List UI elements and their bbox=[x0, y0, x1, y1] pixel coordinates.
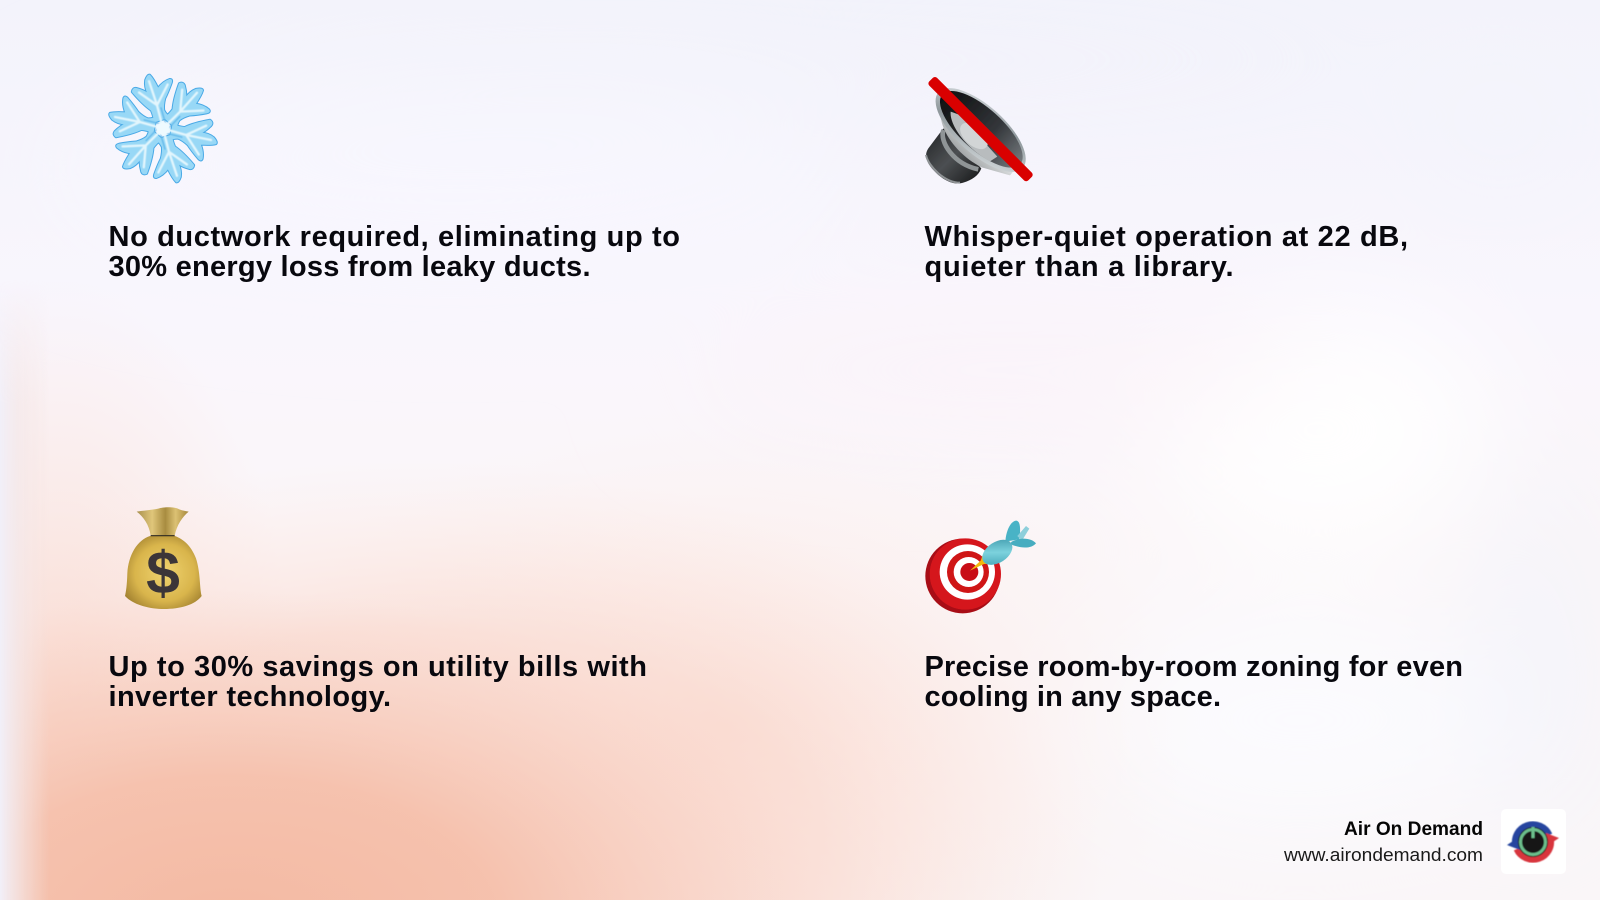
text: no ductwork bbox=[108, 221, 680, 283]
panel: savings bbox=[108, 507, 647, 713]
text: zoning bbox=[924, 651, 1463, 713]
brand name: Air On Demand bbox=[1344, 819, 1483, 840]
icon: money bag bbox=[125, 507, 202, 609]
text: savings: inverter technology. bbox=[108, 681, 391, 713]
text: no ductwork: 30% energy loss from leaky ducts. bbox=[108, 251, 590, 283]
text: zoning: cooling in any space. bbox=[924, 681, 1221, 713]
text: whisper quiet bbox=[924, 221, 1408, 283]
dollar sign: $ bbox=[146, 539, 180, 607]
brand url: www.airondemand.com bbox=[1283, 845, 1483, 865]
text: no ductwork: No ductwork required, eliminating up to bbox=[108, 221, 680, 253]
text: whisper quiet: quieter than a library. bbox=[924, 251, 1234, 283]
icon: target with dart bbox=[925, 521, 1036, 613]
branding footer bbox=[1283, 809, 1566, 874]
text: zoning: Precise room-by-room zoning for even bbox=[924, 651, 1463, 683]
panel: no ductwork bbox=[101, 75, 680, 283]
text: savings bbox=[108, 651, 647, 713]
background gradient bbox=[2, 318, 1481, 900]
icon: snowflake bbox=[101, 75, 225, 182]
panel: zoning bbox=[924, 521, 1463, 713]
text: savings: Up to 30% savings on utility bills with bbox=[108, 651, 647, 683]
icon: muted speaker bbox=[922, 74, 1039, 186]
logo bbox=[1501, 809, 1566, 874]
text: whisper quiet: Whisper-quiet operation at 22 dB, bbox=[924, 221, 1408, 253]
panel: whisper quiet bbox=[922, 74, 1408, 283]
